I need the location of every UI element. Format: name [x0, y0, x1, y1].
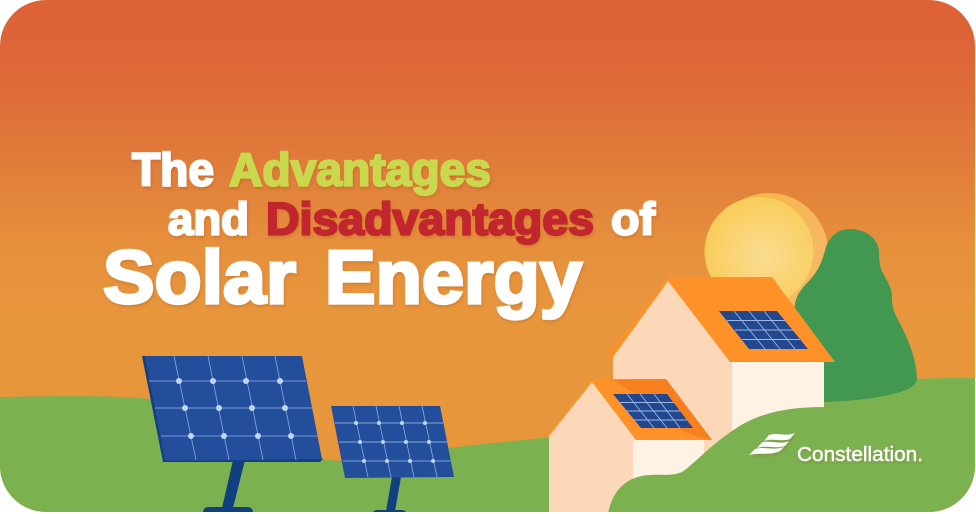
right wall [732, 362, 824, 431]
right wall [633, 440, 704, 479]
grid lines [335, 406, 451, 477]
icon: Constellation swoosh [749, 433, 795, 455]
icon: sun [704, 193, 828, 311]
logo wordmark: Constellation. [797, 443, 923, 466]
title line 1: Advantages [229, 144, 491, 196]
logo [749, 433, 923, 466]
title [103, 144, 656, 319]
roof shade [613, 379, 712, 440]
title line 2: Disadvantages [266, 194, 594, 244]
title line 2: and [168, 194, 249, 244]
title line 2 [168, 194, 656, 244]
small solar panel [331, 406, 454, 514]
post [222, 460, 245, 508]
roof solar panel [613, 394, 693, 428]
left hill [0, 396, 560, 514]
title line 3: Solar [103, 235, 296, 319]
title line 3: Energy [325, 235, 582, 319]
left wall [549, 382, 636, 514]
large solar panel [142, 356, 323, 514]
grid lines [149, 356, 318, 460]
title line 3 [103, 235, 582, 319]
panel frame [142, 356, 323, 462]
base [203, 507, 253, 512]
panel face [145, 356, 322, 461]
roof [606, 277, 835, 362]
panel face [331, 406, 454, 478]
front hill [608, 378, 976, 514]
cell nodes [176, 378, 294, 439]
title line 1: The [132, 144, 214, 196]
title line 2: of [611, 194, 656, 244]
small house [547, 379, 712, 514]
left wall [613, 281, 732, 470]
roof [547, 379, 712, 440]
cell nodes [354, 421, 435, 463]
roof solar panel [719, 311, 808, 349]
post [386, 477, 401, 511]
big house [606, 277, 835, 470]
tree [795, 229, 917, 410]
base [373, 510, 406, 512]
